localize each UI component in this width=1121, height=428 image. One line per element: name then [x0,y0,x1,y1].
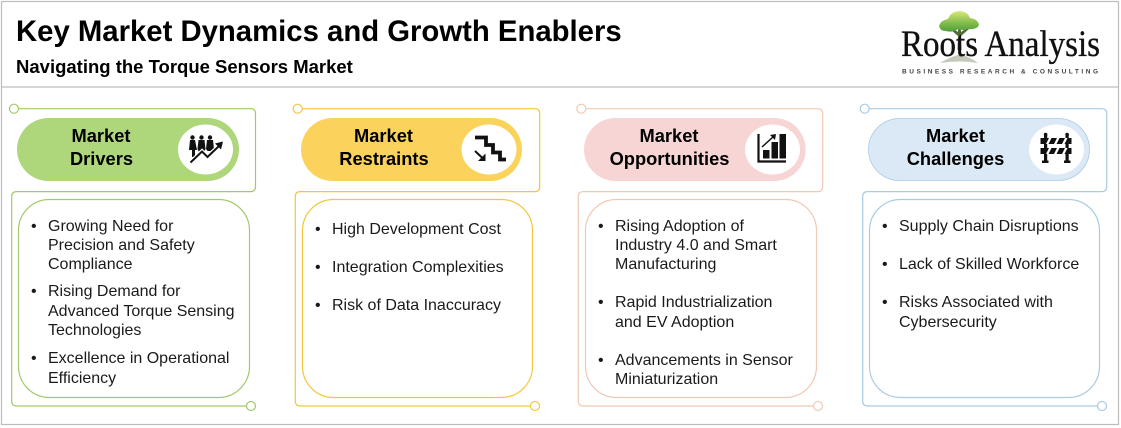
content box: Technologies [48,322,141,339]
panel frame [577,104,823,410]
panel frame [10,104,256,410]
content box: and EV Adoption [615,314,734,331]
content box: High Development Cost [332,221,502,238]
icon: bar chart with arrow [758,134,786,162]
content box: Efficiency [48,370,116,387]
heading pill [301,118,522,181]
content box: • [598,352,604,369]
content box: Advancements in Sensor [615,352,794,369]
content box: Lack of Skilled Workforce [899,256,1079,273]
content box [586,200,816,398]
content box: Industry 4.0 and Smart [615,237,777,254]
heading pill [868,118,1090,180]
title: Key Market Dynamics and Growth Enablers [16,15,622,48]
content box: Integration Complexities [332,259,504,276]
content box: Advanced Torque Sensing [48,303,235,320]
panel: market challenges [860,104,1107,410]
content box: Rapid Industrialization [615,294,772,311]
heading pill: Market [354,125,413,146]
heading pill [584,118,806,181]
content box: • [315,297,321,314]
content box: Excellence in Operational [48,350,229,367]
content box [302,200,532,398]
heading pill: Opportunities [610,148,729,169]
icon: road barrier [1040,133,1072,163]
logo wordmark: Roots Analysis [901,23,1100,64]
heading pill: Market [640,125,698,146]
content box: Growing Need for [48,218,174,235]
content box: Miniaturization [615,371,718,388]
content box: • [315,259,321,276]
logo tagline: BUSINESS RESEARCH & CONSULTING [902,68,1098,76]
content box: Cybersecurity [899,314,997,331]
icon: tree [939,11,979,63]
content box: • [31,283,37,300]
icon: people with rising arrow [189,135,223,162]
content box: • [31,350,37,367]
content box: Compliance [48,256,133,273]
logo: Roots Analysis [901,11,1100,76]
panel: market opportunities [577,104,823,410]
panel: market drivers [10,104,256,410]
panel frame [860,104,1107,410]
content box: Precision and Safety [48,237,195,254]
content box: • [31,218,37,235]
content box: • [882,256,888,273]
heading pill: Market [72,125,130,146]
content box: Risks Associated with [899,294,1053,311]
heading pill: Challenges [907,148,1004,169]
content box: Risk of Data Inaccuracy [332,297,501,314]
heading pill: Market [926,125,985,146]
icon: descending stairs [475,138,506,161]
content box: Supply Chain Disruptions [899,218,1079,235]
content box: • [882,294,888,311]
panel: market restraints [293,104,540,410]
heading pill [17,118,239,181]
subtitle: Navigating the Torque Sensors Market [16,56,353,77]
content box: • [882,218,888,235]
heading pill: Drivers [70,148,133,169]
content box: • [598,294,604,311]
content box: • [598,218,604,235]
content box: Rising Demand for [48,283,181,300]
content box: Manufacturing [615,256,716,273]
content box [18,200,250,398]
content box [870,200,1100,398]
panel frame [293,104,540,410]
content box: • [315,221,321,238]
heading pill: Restraints [339,148,429,169]
content box: Rising Adoption of [615,218,745,235]
